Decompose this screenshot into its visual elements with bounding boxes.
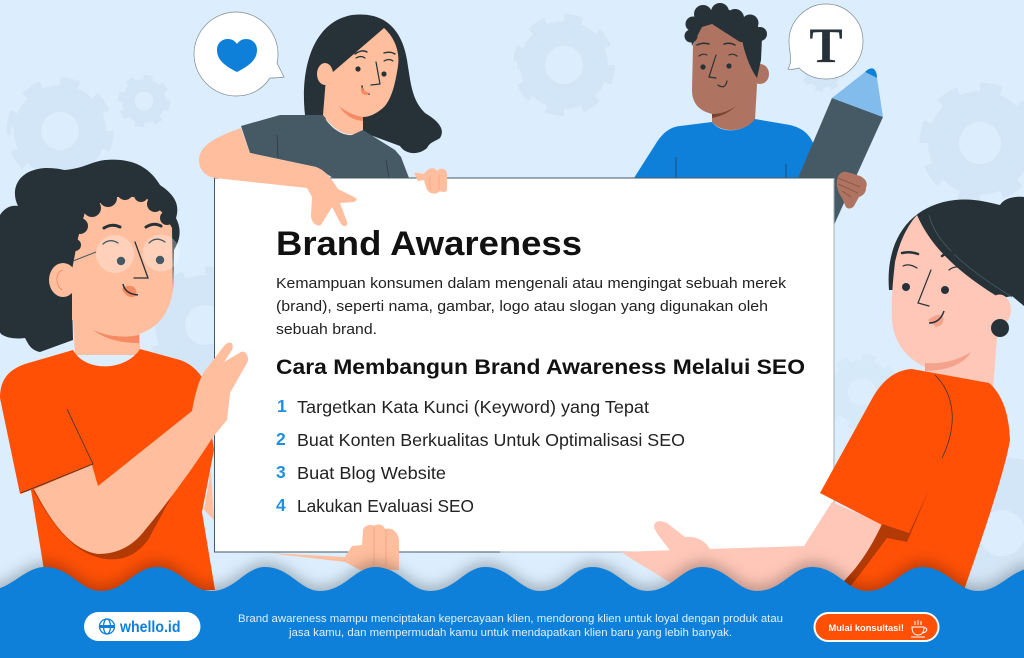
board panel xyxy=(214,178,834,552)
face details xyxy=(697,43,737,87)
face and neck xyxy=(892,215,1000,390)
arm shadow xyxy=(33,470,186,559)
list item 1: Targetkan Kata Kunci (Keyword) yang Tepat xyxy=(297,397,649,417)
list item 4: Lakukan Evaluasi SEO xyxy=(297,496,474,516)
curly hair xyxy=(684,3,767,78)
list item 1: 1 xyxy=(277,396,287,416)
face details xyxy=(103,224,165,278)
beard shadow xyxy=(712,106,736,118)
hand behind board edge xyxy=(204,470,214,520)
hair strand xyxy=(929,215,1012,297)
glasses xyxy=(73,234,180,273)
ear xyxy=(992,294,1011,325)
description paragraph: Kemampuan konsumen dalam mengenali atau mengingat sebuah merek xyxy=(276,275,787,292)
raised arm and hand xyxy=(34,343,248,554)
character: woman in grey shirt xyxy=(241,14,442,178)
face details xyxy=(355,51,395,94)
wave shadow xyxy=(0,562,1024,615)
grey shirt xyxy=(241,115,409,178)
list item 4: 4 xyxy=(276,495,286,515)
blue shirt xyxy=(634,119,814,178)
neck and face xyxy=(692,22,757,130)
neck shadow xyxy=(93,330,139,343)
ear xyxy=(49,263,77,297)
list item 3: 3 xyxy=(276,462,286,482)
speech bubble: letter T xyxy=(788,4,863,79)
shoulder seam xyxy=(935,375,952,458)
hair and bun xyxy=(889,197,1024,306)
face xyxy=(72,197,173,336)
footer message: Brand awareness mampu menciptakan kepercayaan klien, mendorong klien untuk loyal dengan produk atau xyxy=(238,613,783,625)
face details xyxy=(902,252,963,306)
letter T: T xyxy=(809,17,843,73)
description paragraph: (brand), seperti nama, gambar, logo atau slogan yang digunakan oleh xyxy=(276,298,768,315)
ear xyxy=(317,63,333,85)
earring xyxy=(991,319,1009,337)
footer wave band xyxy=(0,567,1024,658)
section heading: Cara Membangun Brand Awareness Melalui SEO xyxy=(276,355,805,379)
man's hand on pencil xyxy=(837,172,867,209)
character: woman with bun and orange shirt xyxy=(621,197,1024,600)
neck and face xyxy=(323,28,398,134)
neck shadow xyxy=(925,352,971,371)
sleeve shadow xyxy=(843,490,929,588)
sleeve seam xyxy=(21,409,93,493)
back hair xyxy=(0,160,180,352)
neck xyxy=(72,300,140,355)
extended arm and hand xyxy=(621,502,885,600)
mouth xyxy=(122,286,136,297)
footer message: jasa kamu, dan mempermudah kamu untuk mendapatkan klien baru yang lebih banyak. xyxy=(288,627,732,639)
hair xyxy=(304,14,442,153)
title: Brand Awareness xyxy=(276,225,582,263)
character: woman with glasses and orange shirt xyxy=(0,160,248,595)
numbered list xyxy=(276,396,685,516)
website address: whello.id xyxy=(119,619,180,636)
grey shirt woman's hand on board xyxy=(414,168,447,194)
orange shirt xyxy=(820,369,1010,595)
button label: Mulai konsultasi! xyxy=(828,623,904,634)
list item 2: Buat Konten Berkualitas Untuk Optimalisasi SEO xyxy=(297,430,685,450)
icon: heart xyxy=(217,39,257,72)
ear xyxy=(751,64,769,84)
footer message xyxy=(238,613,783,639)
mouth xyxy=(928,315,943,327)
grey shirt woman's arm and pointing hand xyxy=(199,128,357,226)
description paragraph xyxy=(276,275,787,338)
list item 3: Buat Blog Website xyxy=(297,463,446,483)
icon: coffee cup xyxy=(911,620,927,637)
pencil xyxy=(798,68,883,225)
website pill xyxy=(84,612,200,641)
icon: globe xyxy=(100,619,114,634)
character: man in blue shirt with pencil xyxy=(634,3,883,225)
board-holding hand bottom xyxy=(268,525,399,570)
speech bubble: heart xyxy=(194,12,284,96)
curly hairline xyxy=(69,184,174,251)
orange shirt xyxy=(0,349,215,595)
description paragraph: sebuah brand. xyxy=(276,321,377,338)
call to action button xyxy=(814,613,938,641)
list item 2: 2 xyxy=(276,429,286,449)
neck shadow xyxy=(339,106,363,121)
